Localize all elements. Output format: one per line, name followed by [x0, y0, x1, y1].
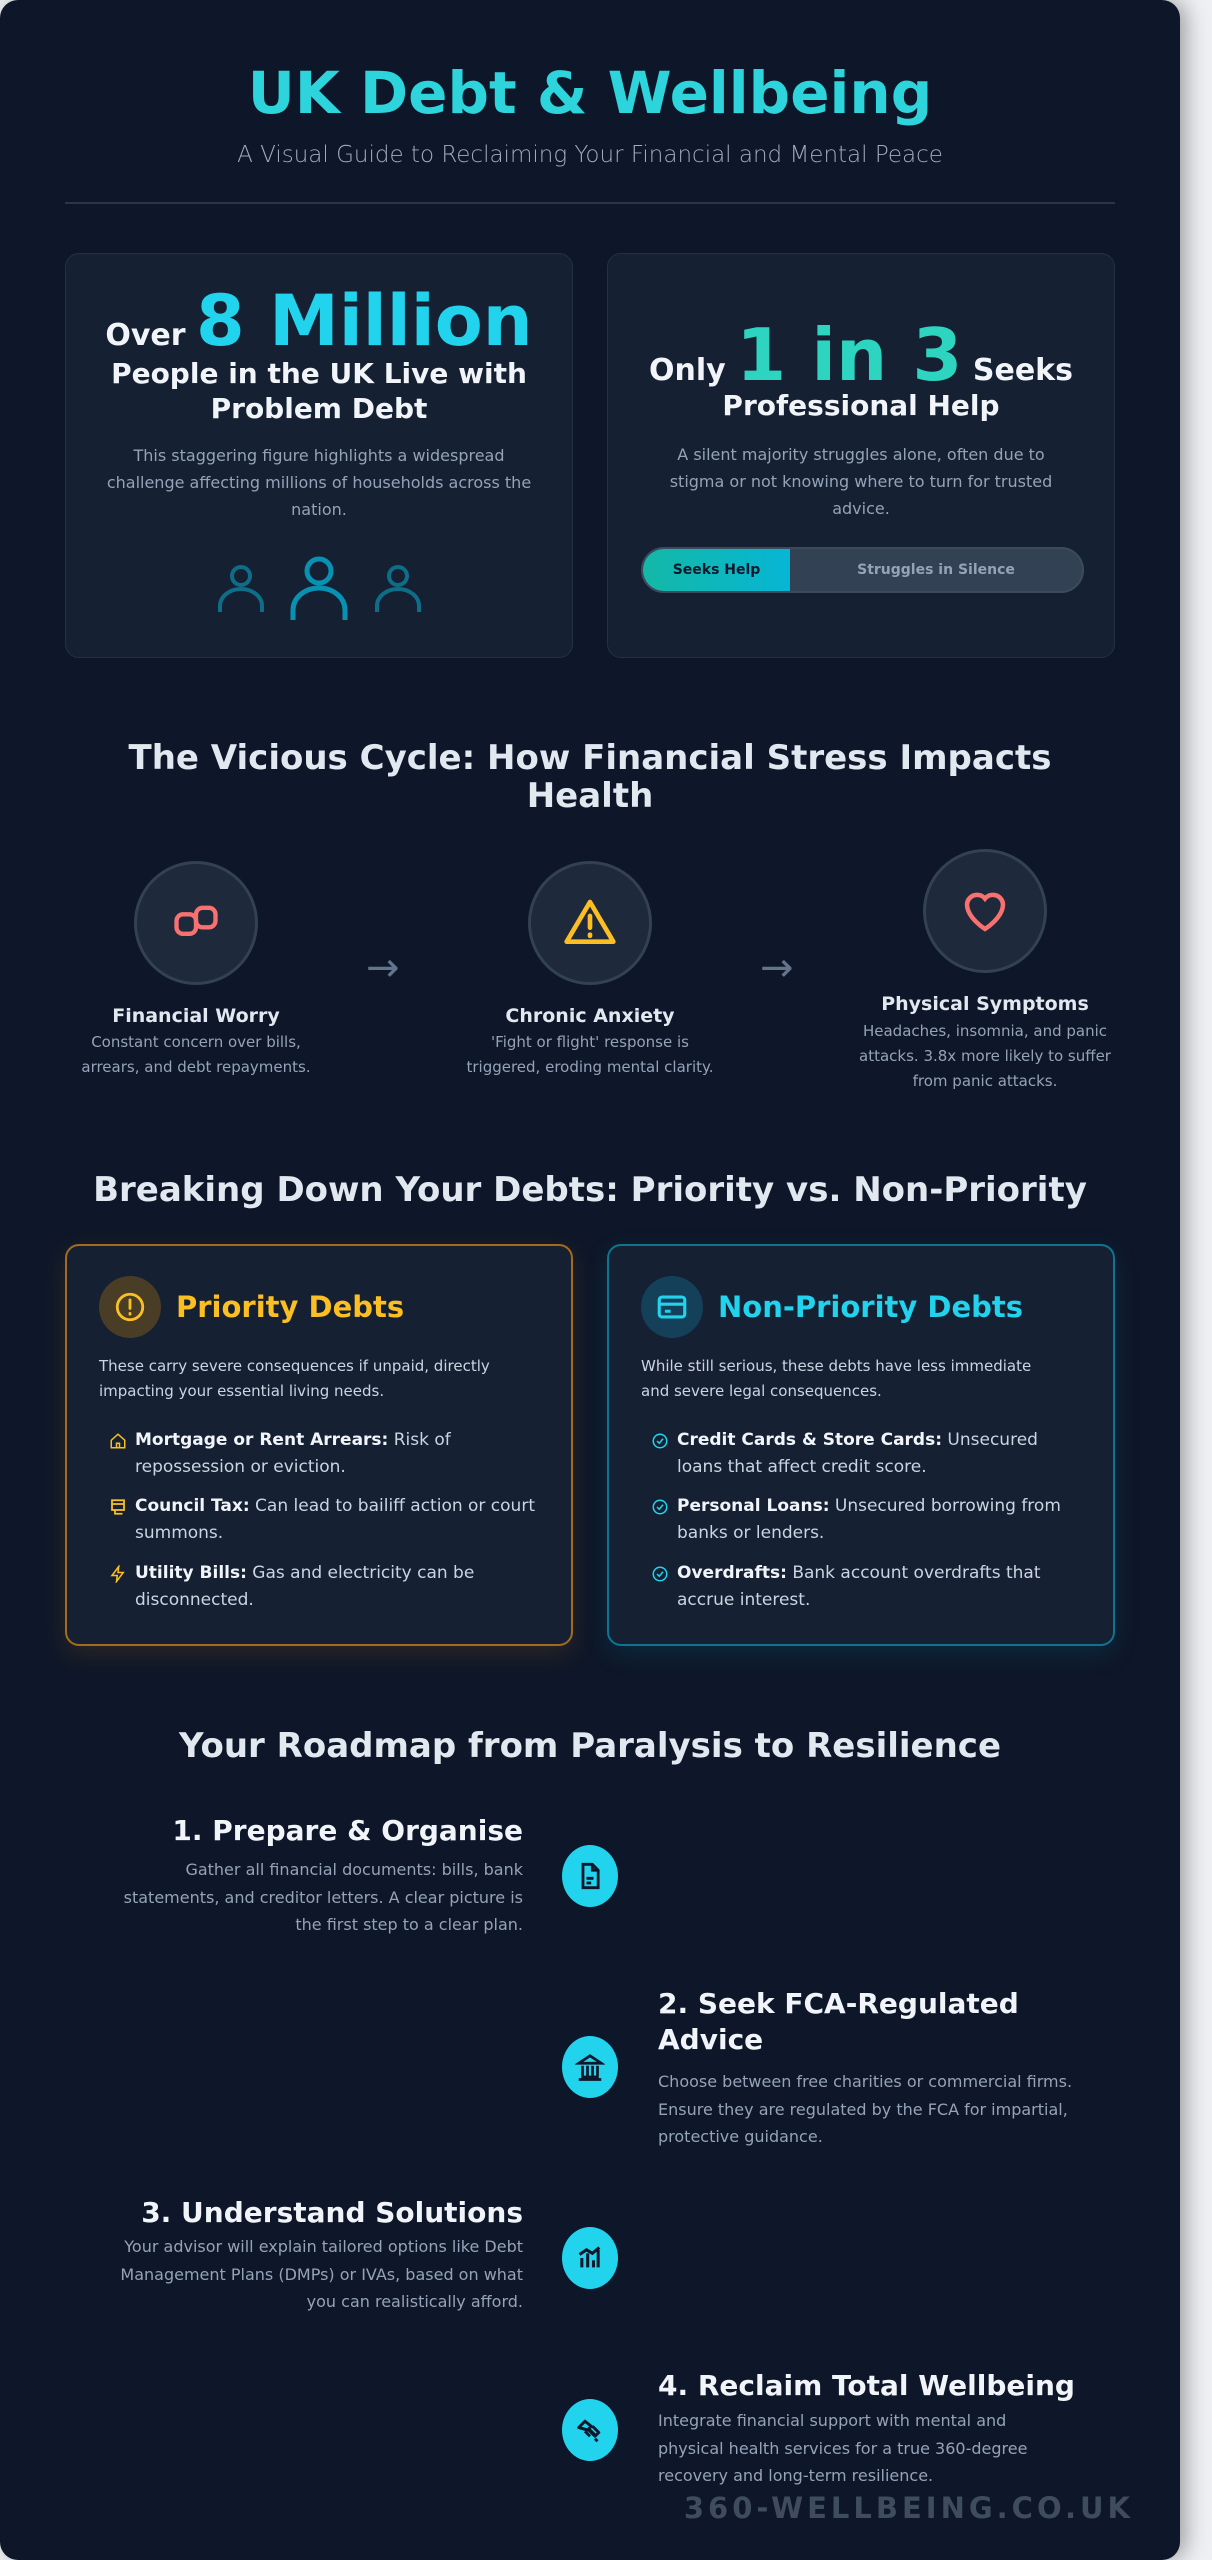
item: mortgage: Mortgage or Rent Arrears: Risk of repossession or eviction. — [135, 1430, 451, 1477]
stat subheading: People in the UK Live with Problem Debt — [111, 357, 527, 425]
cycle step: financial worry: Financial Worry — [112, 1005, 280, 1027]
arrow: → — [760, 945, 794, 991]
heading: priority debts: Priority Debts — [176, 1290, 404, 1324]
footer brand: 360-WELLBEING.CO.UK — [684, 2491, 1134, 2525]
item: council tax: Council Tax: Can lead to bailiff action or court summons. — [135, 1496, 535, 1543]
heading: non-priority debts: Non-Priority Debts — [718, 1290, 1023, 1324]
panel: 1 in 3 stat — [607, 253, 1115, 658]
heading: debts: Breaking Down Your Debts: Priority vs. Non-Priority — [93, 1170, 1087, 1210]
step 4 text: Integrate financial support with mental and physical health services for a true 360-degree recovery and long-term resilience. — [658, 2411, 1027, 2485]
stat description: This staggering figure highlights a widespread challenge affecting millions of households across the nation. — [107, 446, 531, 519]
stat headline: Over 8 Million — [105, 280, 533, 362]
bar chart: help ratio — [641, 547, 1084, 593]
text: chronic anxiety: 'Fight or flight' response is triggered, eroding mental clarity. — [466, 1033, 714, 1076]
stat headline: Only 1 in 3 Seeks — [649, 313, 1073, 397]
icon: credit card — [641, 1276, 703, 1338]
icon: warning — [528, 861, 652, 985]
step 2 heading: 2. Seek FCA-Regulated Advice — [658, 1987, 1019, 2056]
text: priority desc: These carry severe consequences if unpaid, directly impacting your essential living needs. — [99, 1357, 490, 1400]
item: credit cards: Credit Cards & Store Cards: Unsecured loans that affect credit score. — [677, 1430, 1038, 1477]
step 3 text: Your advisor will explain tailored options like Debt Management Plans (DMPs) or IVAs, based on what you can realistically afford. — [120, 2237, 523, 2311]
step 3 heading: 3. Understand Solutions — [141, 2196, 523, 2229]
panel: priority debts — [65, 1244, 573, 1646]
panel: 8 million stat — [65, 253, 573, 658]
item: utility bills: Utility Bills: Gas and electricity can be disconnected. — [135, 1563, 474, 1610]
step 1 heading: 1. Prepare & Organise — [172, 1814, 523, 1847]
stat description: A silent majority struggles alone, often due to stigma or not knowing where to turn for trusted advice. — [670, 445, 1052, 518]
icon: chain link — [134, 861, 258, 985]
heading: roadmap: Your Roadmap from Paralysis to Resilience — [179, 1726, 1001, 1766]
bar chart: help ratio: Struggles in Silence — [857, 562, 1015, 578]
step 2 text: Choose between free charities or commercial firms. Ensure they are regulated by the FCA for impartial, protective guidance. — [658, 2072, 1072, 2146]
subtitle: A Visual Guide to Reclaiming Your Financial and Mental Peace — [237, 142, 943, 168]
step 4 heading: 4. Reclaim Total Wellbeing — [658, 2369, 1075, 2402]
title: UK Debt & Wellbeing — [248, 59, 932, 127]
icon: chart — [562, 2227, 618, 2289]
item: overdrafts: Overdrafts: Bank account overdrafts that accrue interest. — [677, 1563, 1041, 1610]
bar chart: help ratio: Seeks Help — [673, 562, 760, 578]
cycle step: chronic anxiety: Chronic Anxiety — [505, 1005, 675, 1027]
arrow: → — [366, 945, 400, 991]
text: physical symptoms: Headaches, insomnia, and panic attacks. 3.8x more likely to suffer from panic attacks. — [859, 1022, 1111, 1090]
icon: heart — [923, 849, 1047, 973]
icon: handshake — [562, 2399, 618, 2461]
text: non-priority desc: While still serious, these debts have less immediate and severe legal consequences. — [641, 1357, 1031, 1400]
icon: bank — [562, 2036, 618, 2098]
heading: vicious cycle: The Vicious Cycle: How Financial Stress Impacts Health — [129, 738, 1051, 816]
icon: priority alert — [99, 1276, 161, 1338]
stat subheading: Professional Help — [722, 389, 1000, 422]
icon: people — [218, 556, 421, 620]
text: financial worry: Constant concern over bills, arrears, and debt repayments. — [81, 1033, 311, 1076]
cycle step: physical symptoms: Physical Symptoms — [881, 993, 1089, 1015]
icon: document — [562, 1845, 618, 1907]
item: personal loans: Personal Loans: Unsecured borrowing from banks or lenders. — [677, 1496, 1061, 1543]
step 1 text: Gather all financial documents: bills, bank statements, and creditor letters. A clear picture is the first step to a clear plan. — [124, 1860, 523, 1934]
panel: non-priority debts — [607, 1244, 1115, 1646]
